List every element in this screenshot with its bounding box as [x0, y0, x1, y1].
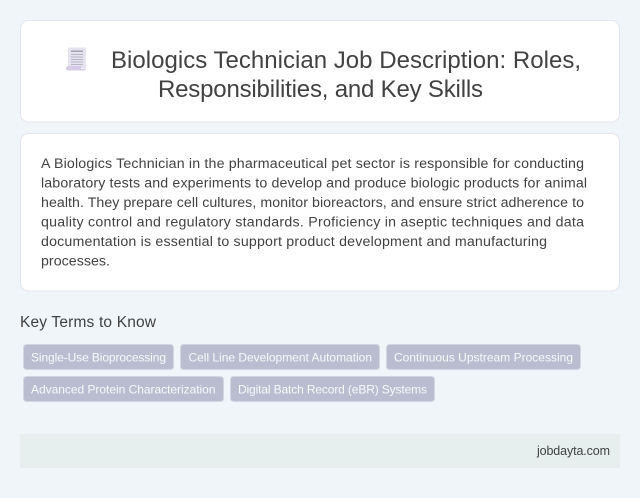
- chip: digital batch record systems: [230, 376, 434, 402]
- chip: single-use bioprocessing: [24, 344, 174, 370]
- title: Responsibilities, and Key Skills: [158, 76, 483, 103]
- chip: continuous upstream processing: [386, 344, 580, 370]
- heading: key terms: Key Terms to Know: [20, 314, 157, 331]
- footer source text: jobdayta.com: [536, 444, 610, 458]
- description text: [41, 156, 587, 270]
- title: [111, 47, 581, 103]
- description text: laboratory tests and experiments to develop and produce biologic products for animal: [41, 176, 587, 192]
- description text: quality control and regulatory standards. Proficiency in aseptic techniques and data: [41, 214, 584, 230]
- panel: title card: [20, 20, 620, 122]
- footer: [20, 434, 620, 468]
- chip: cell line development automation: [180, 344, 380, 370]
- chip: single-use bioprocessing: Single-Use Bioprocessing: [31, 350, 166, 364]
- chip: digital batch record systems: Digital Batch Record (eBR) Systems: [238, 382, 427, 396]
- chip: advanced protein characterization: Advanced Protein Characterization: [31, 382, 216, 396]
- panel: description: [20, 134, 620, 291]
- description text: A Biologics Technician in the pharmaceutical pet sector is responsible for conducting: [41, 156, 584, 172]
- description text: health. They prepare cell cultures, monitor bioreactors, and ensure strict adherence to: [41, 195, 584, 211]
- description text: processes.: [41, 254, 110, 270]
- chip: cell line development automation: Cell Line Development Automation: [188, 350, 372, 364]
- description text: documentation is essential to support product development and manufacturing: [41, 234, 547, 250]
- chip: advanced protein characterization: [24, 376, 224, 402]
- title: Biologics Technician Job Description: Roles,: [111, 47, 581, 74]
- icon: document scroll: [66, 48, 86, 70]
- chip: continuous upstream processing: Continuous Upstream Processing: [394, 350, 573, 364]
- key term chips: [24, 344, 580, 402]
